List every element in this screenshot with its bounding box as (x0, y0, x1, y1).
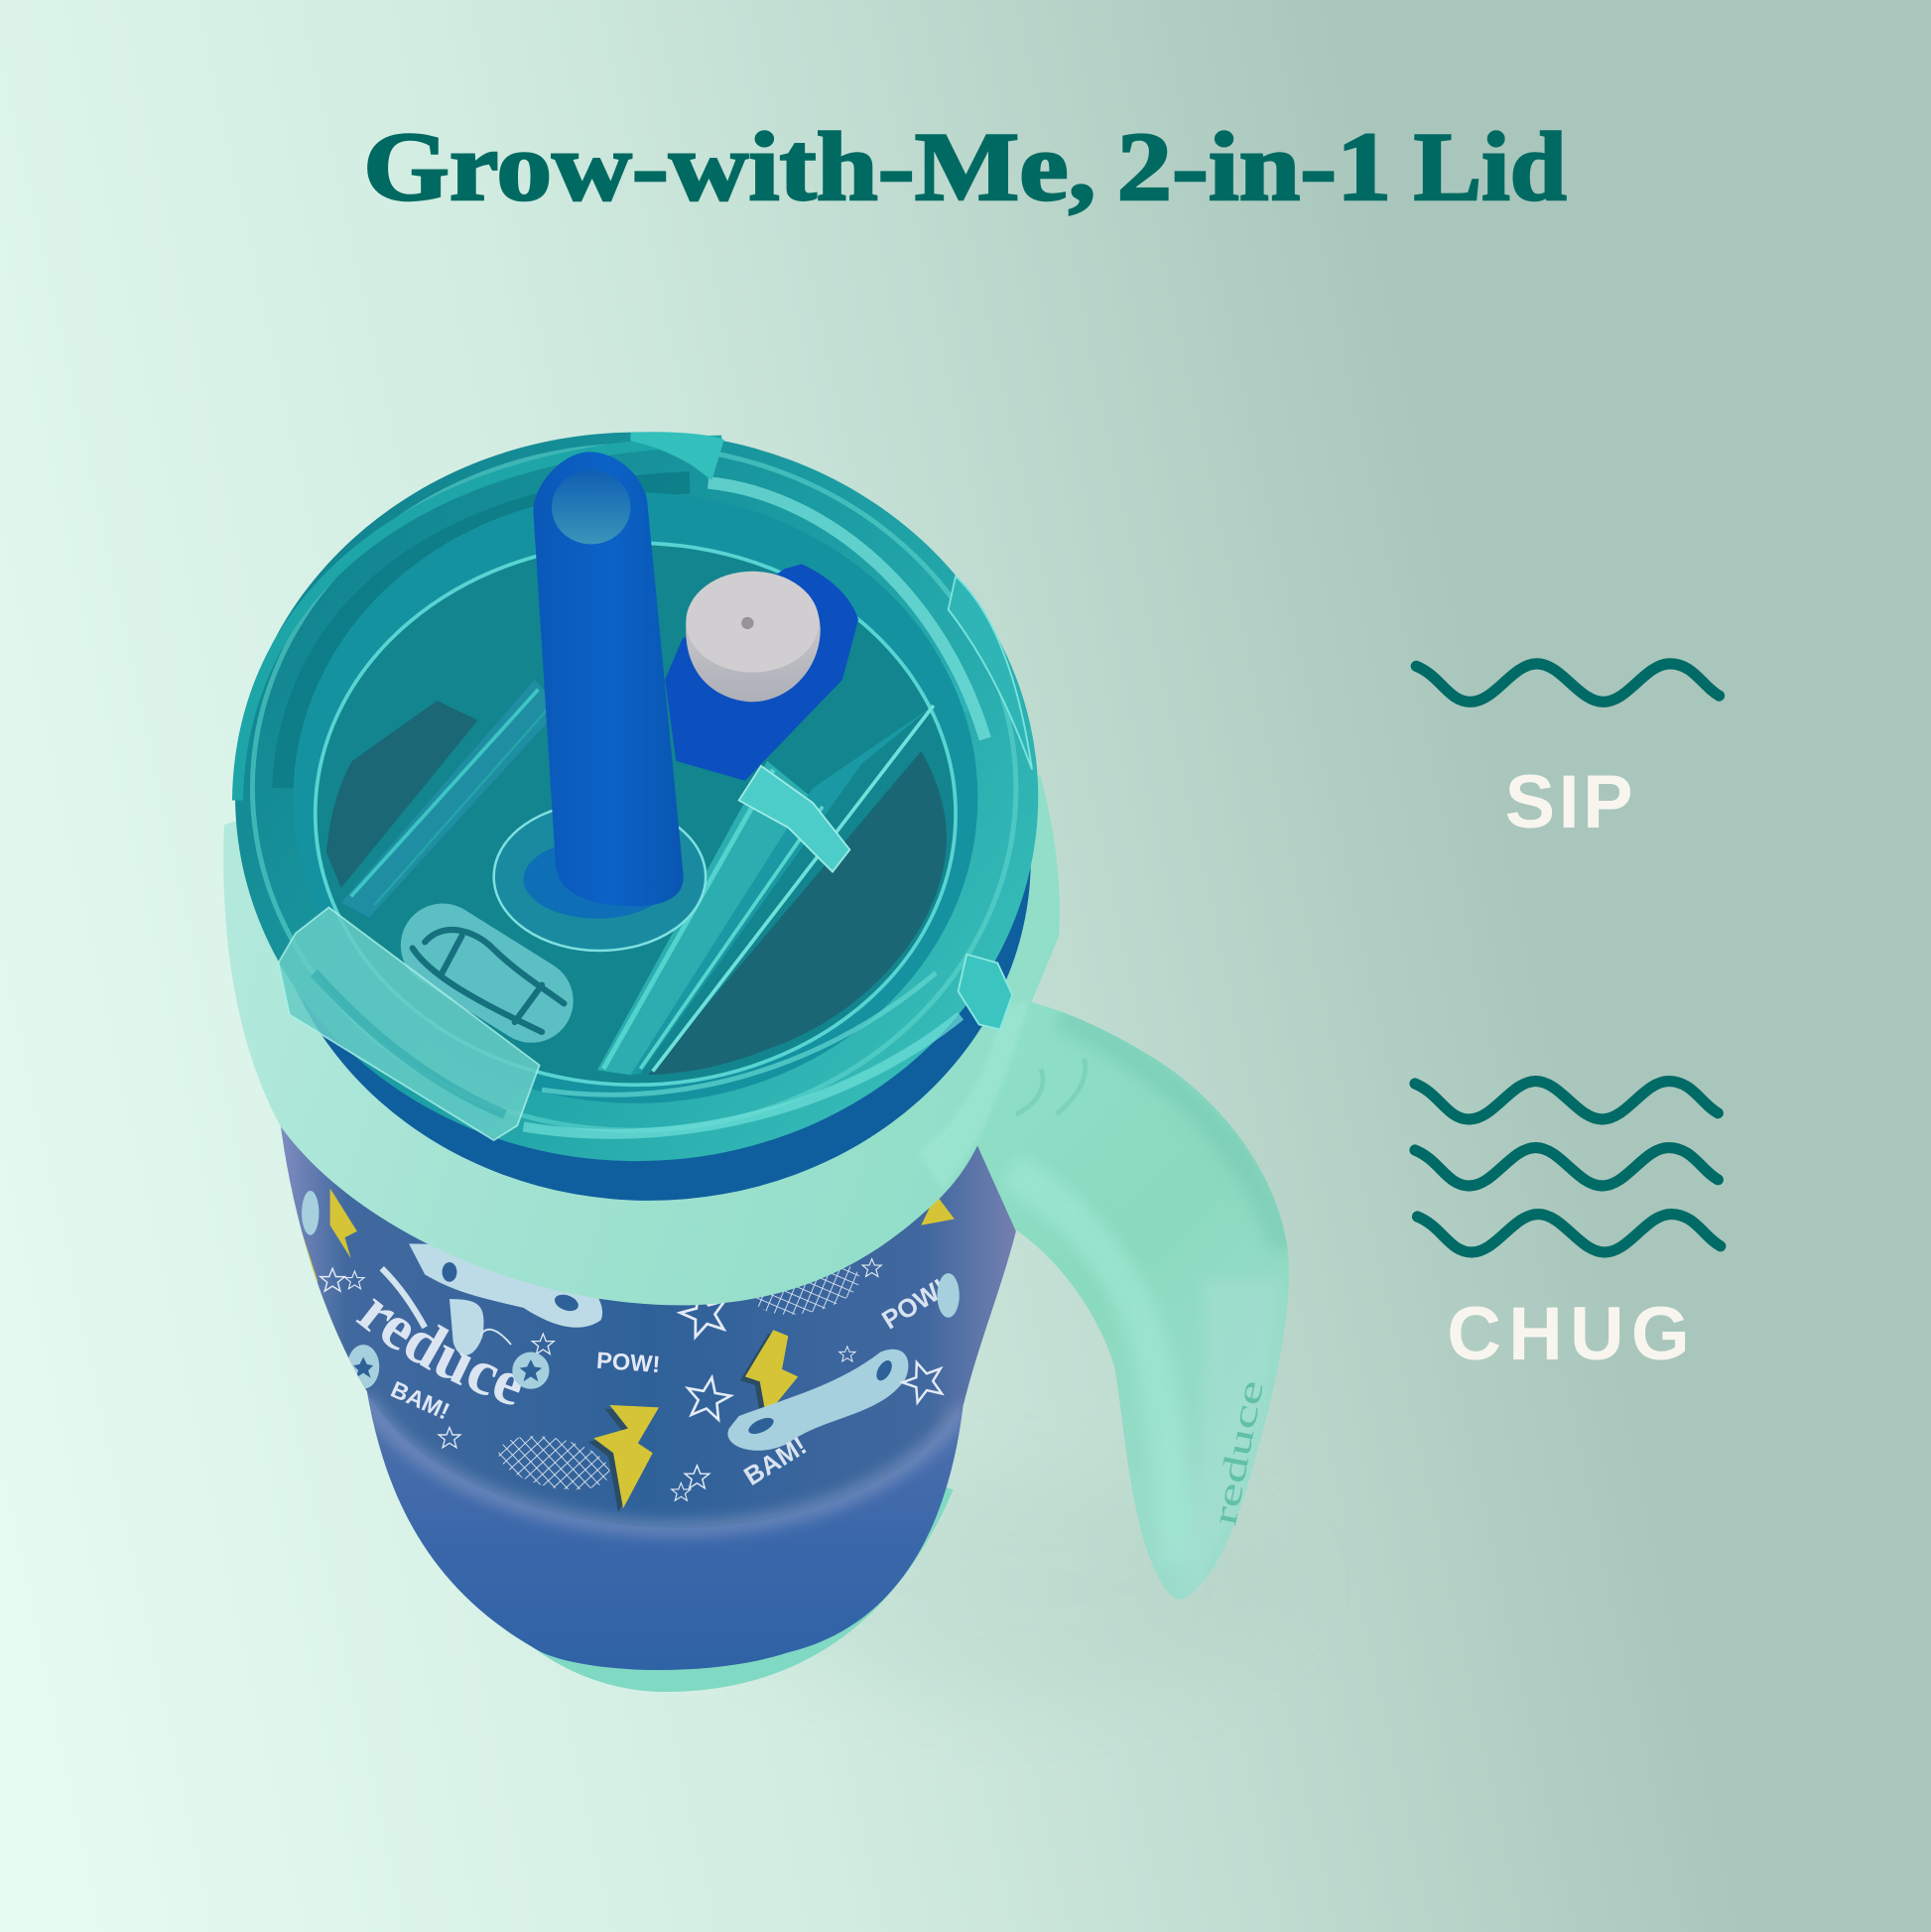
lid notch tip (630, 432, 724, 480)
lid top edge arc (238, 441, 721, 801)
dark window left (326, 701, 478, 888)
sip label: SIP (1505, 760, 1633, 844)
straw base ring (494, 803, 706, 951)
right latch tab (949, 577, 1032, 770)
grey valve cap (686, 572, 821, 702)
blue valve holder (665, 564, 858, 781)
title: 2-in-1 (1117, 114, 1391, 221)
front drink tab (278, 908, 540, 1140)
printed words: POW! (595, 1348, 661, 1377)
printed words: POW! (876, 1272, 952, 1335)
title: Grow-with-Me, (363, 114, 1096, 221)
mask shapes (382, 1243, 908, 1451)
printed words (307, 1232, 960, 1502)
lid recess (293, 492, 977, 1103)
waist highlight (364, 1397, 966, 1528)
blue gasket (267, 518, 1031, 1201)
title: Lid (1414, 114, 1567, 221)
cup base rim (499, 1453, 954, 1692)
lightning bolts (296, 1188, 955, 1512)
cup lower body (367, 1391, 964, 1670)
illustration: tumbler (223, 432, 1289, 1692)
clear clip block (739, 766, 849, 872)
handle leaf mark (1016, 1059, 1086, 1114)
grid ovals (493, 1252, 864, 1498)
title (363, 114, 1567, 221)
right diagonal bars (597, 761, 816, 1075)
printed words: BAM! (387, 1376, 453, 1425)
printed words: reduce (355, 1298, 521, 1405)
sip icon: single wave (1416, 664, 1720, 702)
handle (977, 1002, 1289, 1600)
printed words: BAM! (738, 1430, 812, 1491)
lid outer rim (235, 433, 1038, 1161)
straw (533, 451, 684, 906)
cup printed section (281, 1127, 1016, 1542)
cast shadow (726, 1478, 1293, 1699)
stars (321, 1259, 949, 1500)
chug icon: triple wave (1415, 1082, 1721, 1252)
handle logo: reduce (1206, 1377, 1271, 1528)
right side bead (959, 955, 1012, 1029)
reduce logo oval (385, 888, 589, 1059)
dark window right (648, 751, 947, 1075)
silicone collar (223, 690, 1060, 1305)
lid (235, 432, 1038, 1161)
front lid rim highlight (523, 1016, 961, 1134)
star badges (302, 1191, 960, 1389)
handle join highlight (918, 1000, 1028, 1188)
chug label: CHUG (1447, 1292, 1690, 1376)
left diagonal bar (341, 680, 561, 917)
